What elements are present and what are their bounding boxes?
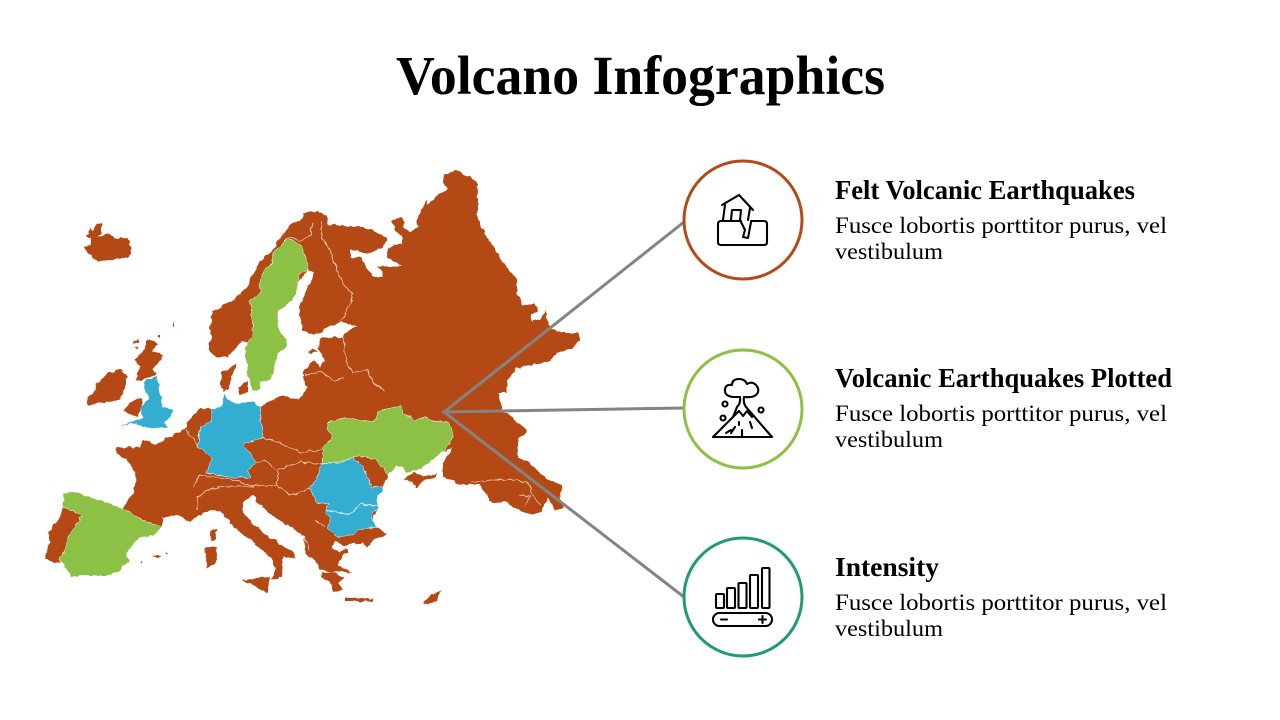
Scotland [135,340,163,380]
body text: vestibulum [835,427,943,452]
map: Romania-Bulgaria border [327,504,378,514]
Balearic islands [140,553,169,564]
panel: felt volcanic earthquakes [684,161,1167,279]
Denmark [221,364,248,395]
Crimea [405,472,437,488]
Ireland [87,369,128,405]
panel: volcanic earthquakes plotted [684,350,1172,468]
body text: Fusce lobortis porttitor purus, vel [835,213,1167,238]
body text: Fusce lobortis porttitor purus, vel [835,590,1167,615]
body text: vestibulum [835,239,943,264]
Corsica [210,529,217,541]
Cyprus [423,590,443,605]
Sweden [244,238,309,390]
map of Europe [45,170,580,605]
Sardinia [205,547,217,568]
map: orange countries [45,170,580,605]
connector lines [442,222,684,597]
body text: Fusce lobortis porttitor purus, vel [835,401,1167,426]
circle badge [684,538,802,656]
icon: cracked house [718,195,767,245]
Baltic island [308,348,317,354]
icon: erupting volcano [713,379,772,437]
small north islands [133,322,174,350]
circle badge [684,161,802,279]
Wales and southwest island detail [123,398,142,417]
title: Volcano Infographics [396,45,885,106]
Germany [198,393,263,478]
line to volcano circle [442,408,684,412]
map: blue countries [117,375,383,537]
Portugal [45,506,82,563]
line to earthquake circle [444,222,684,412]
Ukraine [322,406,453,475]
heading: Intensity [835,552,940,582]
body text: vestibulum [835,616,943,641]
line to intensity circle [444,412,684,597]
heading: Volcanic Earthquakes Plotted [835,363,1172,393]
Romania and Bulgaria [310,458,383,537]
Spain [60,492,163,577]
icon: intensity meter [713,568,772,626]
Crete [345,597,373,601]
England [117,375,173,428]
heading: Felt Volcanic Earthquakes [835,175,1135,205]
mainland Europe and Russia [115,170,580,592]
Sicily [242,577,270,593]
circle badge [684,350,802,468]
map: green countries [60,238,453,577]
panel: intensity [684,538,1167,656]
map: country borders [186,221,540,550]
Iceland [83,223,131,262]
